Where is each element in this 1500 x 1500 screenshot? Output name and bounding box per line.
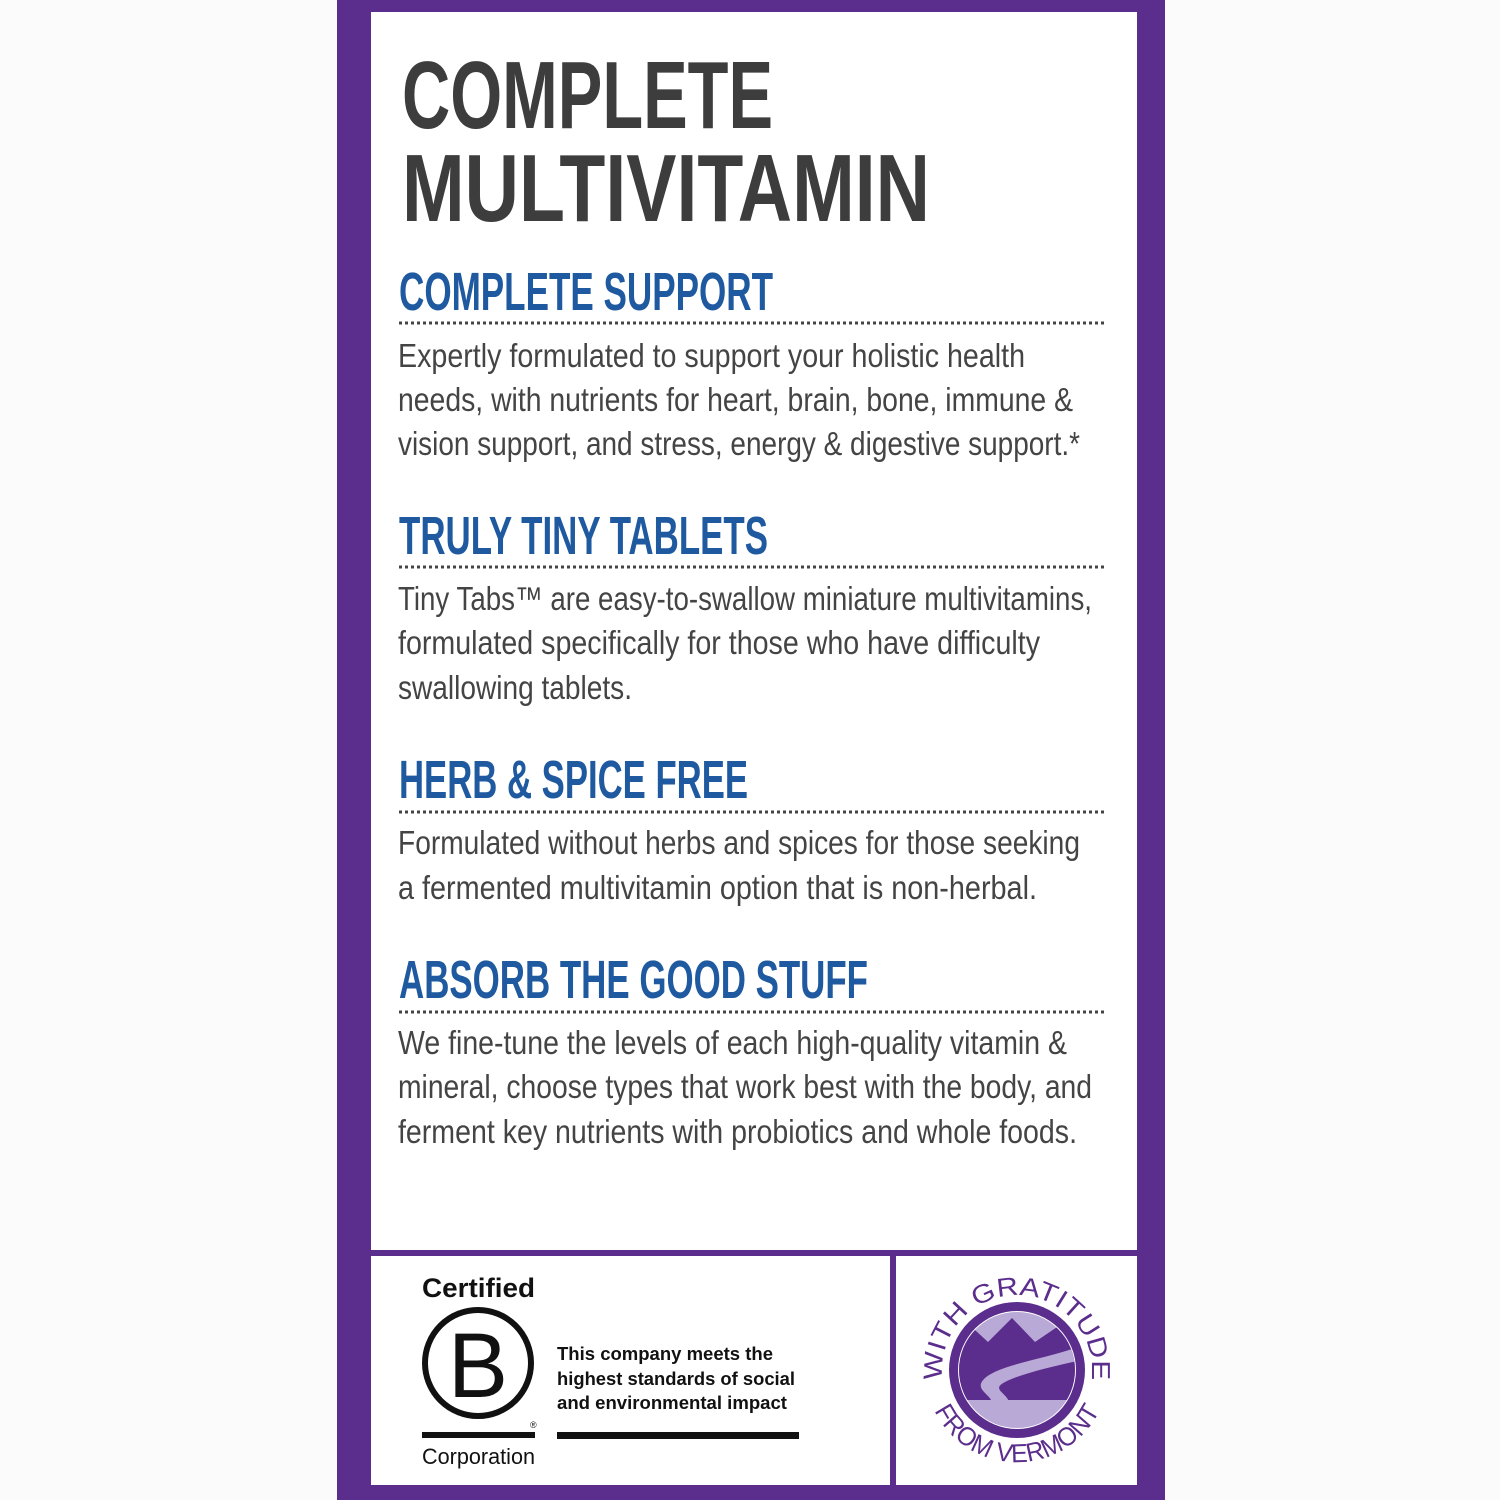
B corp statement xyxy=(557,1344,799,1439)
purple frame xyxy=(337,0,1165,1500)
section: truly tiny tablets: formulated specifically for those who have difficulty xyxy=(398,624,1040,661)
title: MULTIVITAMIN xyxy=(402,135,930,242)
section: complete support: needs, with nutrients for heart, brain, bone, immune & xyxy=(398,381,1073,418)
B corp logo: B xyxy=(448,1315,508,1417)
section: absorb the good stuff xyxy=(398,950,1105,1150)
B corp logo: ® xyxy=(530,1420,537,1430)
B corp statement: This company meets the xyxy=(557,1344,773,1364)
section: absorb the good stuff: mineral, choose types that work best with the body, and xyxy=(398,1068,1092,1105)
B corp logo xyxy=(422,1273,537,1469)
section: absorb the good stuff: ABSORB THE GOOD STUFF xyxy=(399,950,868,1010)
B corp logo: Certified xyxy=(422,1273,535,1303)
section: absorb the good stuff: ferment key nutrients with probiotics and whole foods. xyxy=(398,1113,1077,1150)
section: truly tiny tablets: Tiny Tabs™ are easy-to-swallow miniature multivitamins, xyxy=(398,580,1092,617)
section: complete support: COMPLETE SUPPORT xyxy=(399,262,773,322)
title xyxy=(402,42,930,242)
section: truly tiny tablets xyxy=(398,506,1105,706)
B corp logo: Corporation xyxy=(422,1444,535,1469)
section: complete support xyxy=(398,262,1105,462)
badge: with gratitude from vermont xyxy=(924,1278,1110,1462)
section: truly tiny tablets: swallowing tablets. xyxy=(398,669,632,706)
section: herb & spice free: Formulated without herbs and spices for those seeking xyxy=(398,824,1080,861)
badge: with gratitude from vermont: FROM VERMONT xyxy=(935,1402,1097,1462)
B corp statement: highest standards of social xyxy=(557,1369,795,1389)
B corp statement: and environmental impact xyxy=(557,1393,787,1413)
section: complete support: Expertly formulated to support your holistic health xyxy=(398,337,1025,374)
section: absorb the good stuff: We fine-tune the levels of each high-quality vitamin & xyxy=(398,1024,1067,1061)
title: COMPLETE xyxy=(402,42,773,149)
section: herb & spice free: a fermented multivitamin option that is non-herbal. xyxy=(398,869,1037,906)
section: herb & spice free: HERB & SPICE FREE xyxy=(399,750,748,810)
badge: with gratitude from vermont: WITH GRATITUDE xyxy=(924,1278,1110,1379)
section: truly tiny tablets: TRULY TINY TABLETS xyxy=(399,506,768,566)
section: complete support: vision support, and stress, energy & digestive support.* xyxy=(398,425,1080,462)
section: herb & spice free xyxy=(398,750,1105,906)
